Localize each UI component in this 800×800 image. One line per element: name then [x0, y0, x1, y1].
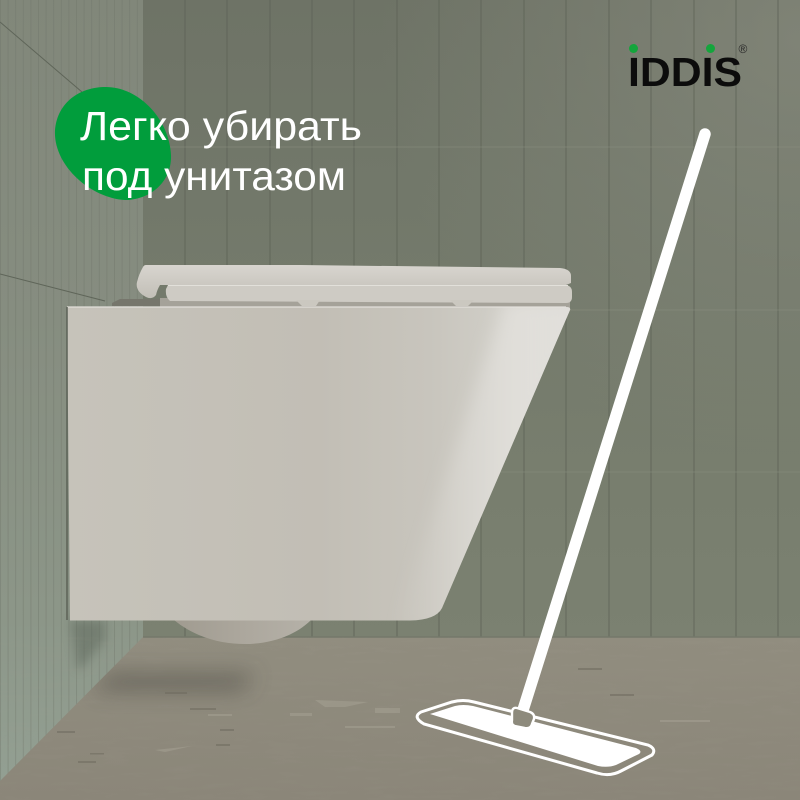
green blob [55, 87, 171, 200]
logo: IDDIS: ® [738, 42, 748, 56]
seat gap [160, 296, 570, 308]
lid [137, 265, 571, 298]
headline: под унитазом [82, 153, 346, 199]
headline: Легко убирать [80, 103, 362, 149]
bowl underside [174, 620, 311, 644]
logo dots [629, 44, 715, 53]
mop pad [430, 705, 640, 767]
fluted side wall [0, 0, 143, 790]
icon: mop [417, 134, 705, 775]
toilet shadow on floor [92, 674, 255, 690]
mop handle [523, 134, 705, 710]
hinge [112, 299, 178, 306]
seat bumpers [296, 300, 474, 306]
mop connector [512, 708, 534, 728]
tiled wall [143, 0, 800, 640]
headline [80, 103, 362, 199]
logo: IDDIS: IDDIS [628, 49, 742, 95]
floor [0, 637, 800, 800]
toilet [67, 265, 590, 644]
mop outline [417, 700, 654, 775]
main body [67, 307, 570, 620]
glossy highlight [434, 307, 570, 616]
seat [166, 285, 572, 303]
